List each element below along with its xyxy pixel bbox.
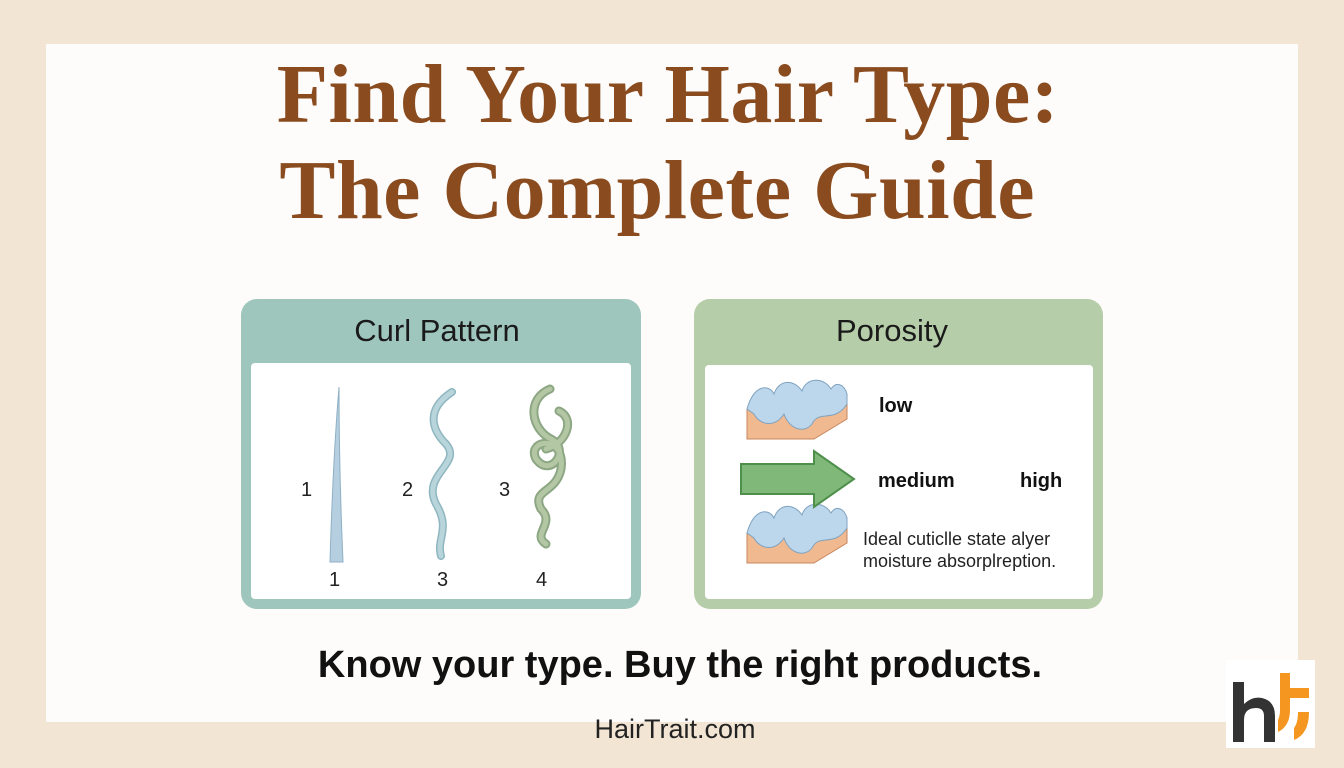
tagline: Know your type. Buy the right products. bbox=[318, 644, 1042, 686]
porosity illustrations: high bbox=[1020, 470, 1062, 492]
curl illustrations: 1 bbox=[329, 569, 340, 591]
title bbox=[277, 48, 1059, 237]
porosity illustrations bbox=[740, 380, 1062, 571]
heading: curl pattern: Curl Pattern bbox=[354, 313, 520, 348]
heading: porosity: Porosity bbox=[836, 313, 948, 348]
panel: porosity bbox=[694, 299, 1103, 609]
porosity illustrations: medium bbox=[878, 470, 955, 492]
panel: curl pattern bbox=[241, 299, 641, 609]
porosity illustrations: low bbox=[879, 395, 913, 417]
curl illustrations bbox=[301, 384, 572, 591]
title: The Complete Guide bbox=[279, 144, 1035, 237]
title: Find Your Hair Type: bbox=[277, 48, 1059, 141]
porosity illustrations: Ideal cuticlle state alyer bbox=[863, 529, 1050, 549]
footer url: HairTrait.com bbox=[594, 714, 756, 744]
curl illustrations: 2 bbox=[402, 479, 413, 501]
curl illustrations: 4 bbox=[536, 569, 547, 591]
logo bbox=[1226, 660, 1315, 748]
curl illustrations: 1 bbox=[301, 479, 312, 501]
porosity illustrations: moisture absorplreption. bbox=[863, 551, 1056, 571]
curl illustrations: 3 bbox=[499, 479, 510, 501]
curl illustrations: 3 bbox=[437, 569, 448, 591]
